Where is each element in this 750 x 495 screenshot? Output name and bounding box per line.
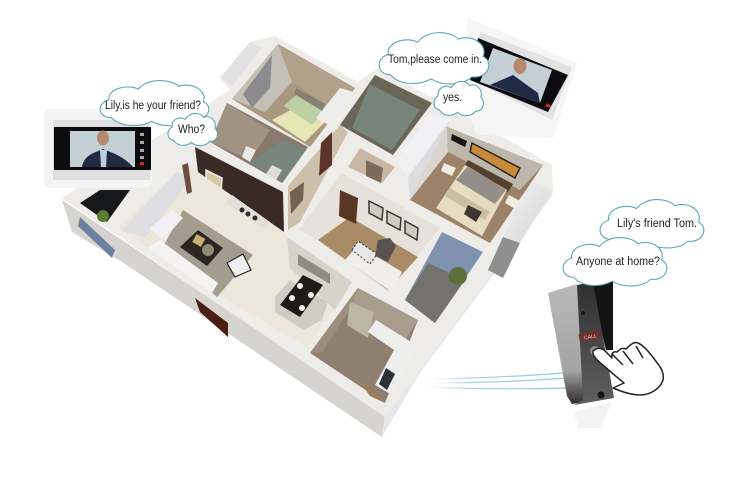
outer side wall bbox=[382, 190, 553, 437]
house top base bbox=[62, 36, 553, 417]
lens hole bbox=[598, 392, 604, 398]
dining frames bbox=[298, 254, 330, 284]
side box bbox=[503, 180, 553, 243]
speech bubble: Who: Who? bbox=[178, 124, 205, 136]
speech bubble: friend: Lily's friend Tom. bbox=[617, 218, 697, 230]
hob bbox=[379, 368, 395, 390]
motion lines bbox=[425, 373, 567, 389]
door lower bbox=[290, 182, 304, 214]
wall art bbox=[206, 170, 222, 194]
video feed bbox=[70, 131, 135, 167]
outer front wall bbox=[62, 200, 385, 437]
speech bubble: yes bbox=[434, 81, 483, 116]
coffee table bbox=[180, 230, 223, 266]
speech bubble: Lily bbox=[100, 81, 209, 126]
speech bubble: Tom bbox=[379, 33, 489, 84]
long sofa bbox=[148, 240, 218, 293]
speech bubble: friend bbox=[600, 200, 704, 248]
left monitor bbox=[44, 109, 152, 188]
doorbell back bbox=[590, 281, 613, 350]
bed bbox=[272, 105, 325, 142]
doorbell reflection bbox=[574, 402, 612, 428]
zebra chair bbox=[352, 241, 377, 264]
room: bathroom bbox=[210, 103, 308, 183]
side box grey face bbox=[488, 237, 520, 278]
visitor suit bbox=[82, 149, 133, 167]
visitor shirt bbox=[100, 150, 107, 167]
room: living floor bbox=[118, 163, 352, 348]
counter bbox=[368, 320, 416, 395]
low wall bbox=[345, 245, 402, 292]
visitor head bbox=[97, 130, 109, 146]
rug bbox=[163, 210, 253, 297]
speech bubble: Anyone: Anyone at home? bbox=[576, 256, 660, 268]
doorbell side bbox=[548, 284, 584, 404]
roof box upper left bbox=[220, 42, 262, 86]
glass shower bbox=[250, 140, 306, 182]
call label: CALL bbox=[584, 333, 597, 341]
speech bubble: yes: yes. bbox=[443, 92, 462, 104]
call label bbox=[578, 330, 601, 342]
room: kitchen bbox=[310, 288, 418, 403]
balcony plant bbox=[97, 210, 109, 222]
dining chairs bbox=[275, 280, 328, 330]
doorbell bbox=[548, 281, 614, 428]
picture frames bbox=[369, 201, 383, 220]
left wall bbox=[122, 172, 190, 238]
bed bbox=[436, 165, 507, 236]
room: blue balcony bbox=[405, 232, 483, 323]
chair bbox=[375, 238, 396, 262]
room: master bedroom bbox=[410, 127, 543, 243]
white partition top bbox=[397, 113, 450, 177]
sofa bbox=[150, 210, 183, 240]
dining wall bbox=[287, 237, 352, 310]
wall monitor bbox=[451, 134, 467, 147]
armchair bbox=[227, 254, 251, 277]
fridge bbox=[347, 302, 374, 338]
dark feature wall bbox=[195, 147, 284, 232]
control buttons bbox=[140, 133, 144, 159]
door bbox=[339, 190, 358, 224]
side window bbox=[78, 217, 115, 258]
speech bubble: Anyone bbox=[563, 238, 667, 286]
bedside tables bbox=[441, 163, 456, 176]
doorbell front bbox=[574, 282, 614, 405]
room: glass room bbox=[340, 75, 432, 155]
dining table bbox=[280, 275, 323, 317]
hand pointer bbox=[593, 343, 663, 395]
room: study bbox=[298, 173, 440, 292]
video feed bbox=[480, 48, 552, 103]
visitor head bbox=[514, 58, 526, 74]
plates bbox=[297, 283, 303, 289]
wall art bbox=[470, 143, 520, 178]
speech bubble: Who bbox=[168, 113, 217, 146]
pillar bbox=[182, 163, 192, 194]
plant bbox=[449, 267, 467, 285]
door bbox=[319, 132, 332, 176]
wood floor strip bbox=[360, 382, 385, 403]
balcony window bbox=[80, 190, 130, 222]
room: corridor wall bbox=[288, 125, 348, 230]
room: upper bedroom bbox=[232, 44, 355, 147]
bed runner bbox=[445, 188, 490, 220]
wardrobe bbox=[243, 55, 272, 108]
headboard bbox=[463, 160, 513, 192]
white partition bbox=[316, 88, 354, 126]
speech bubble: Tom: Tom,please come in. bbox=[388, 54, 482, 66]
room: small hall bbox=[348, 148, 395, 183]
right monitor bbox=[460, 18, 577, 138]
visitor suit bbox=[490, 75, 540, 103]
TV console bbox=[226, 195, 270, 228]
speech bubble: Lily: Lily,is he your friend? bbox=[105, 100, 201, 112]
call button bbox=[590, 346, 600, 356]
front door bbox=[195, 298, 228, 337]
floor plan model bbox=[62, 36, 553, 437]
white partition face bbox=[408, 120, 450, 200]
toilet bbox=[242, 146, 256, 162]
red button bbox=[545, 103, 551, 108]
